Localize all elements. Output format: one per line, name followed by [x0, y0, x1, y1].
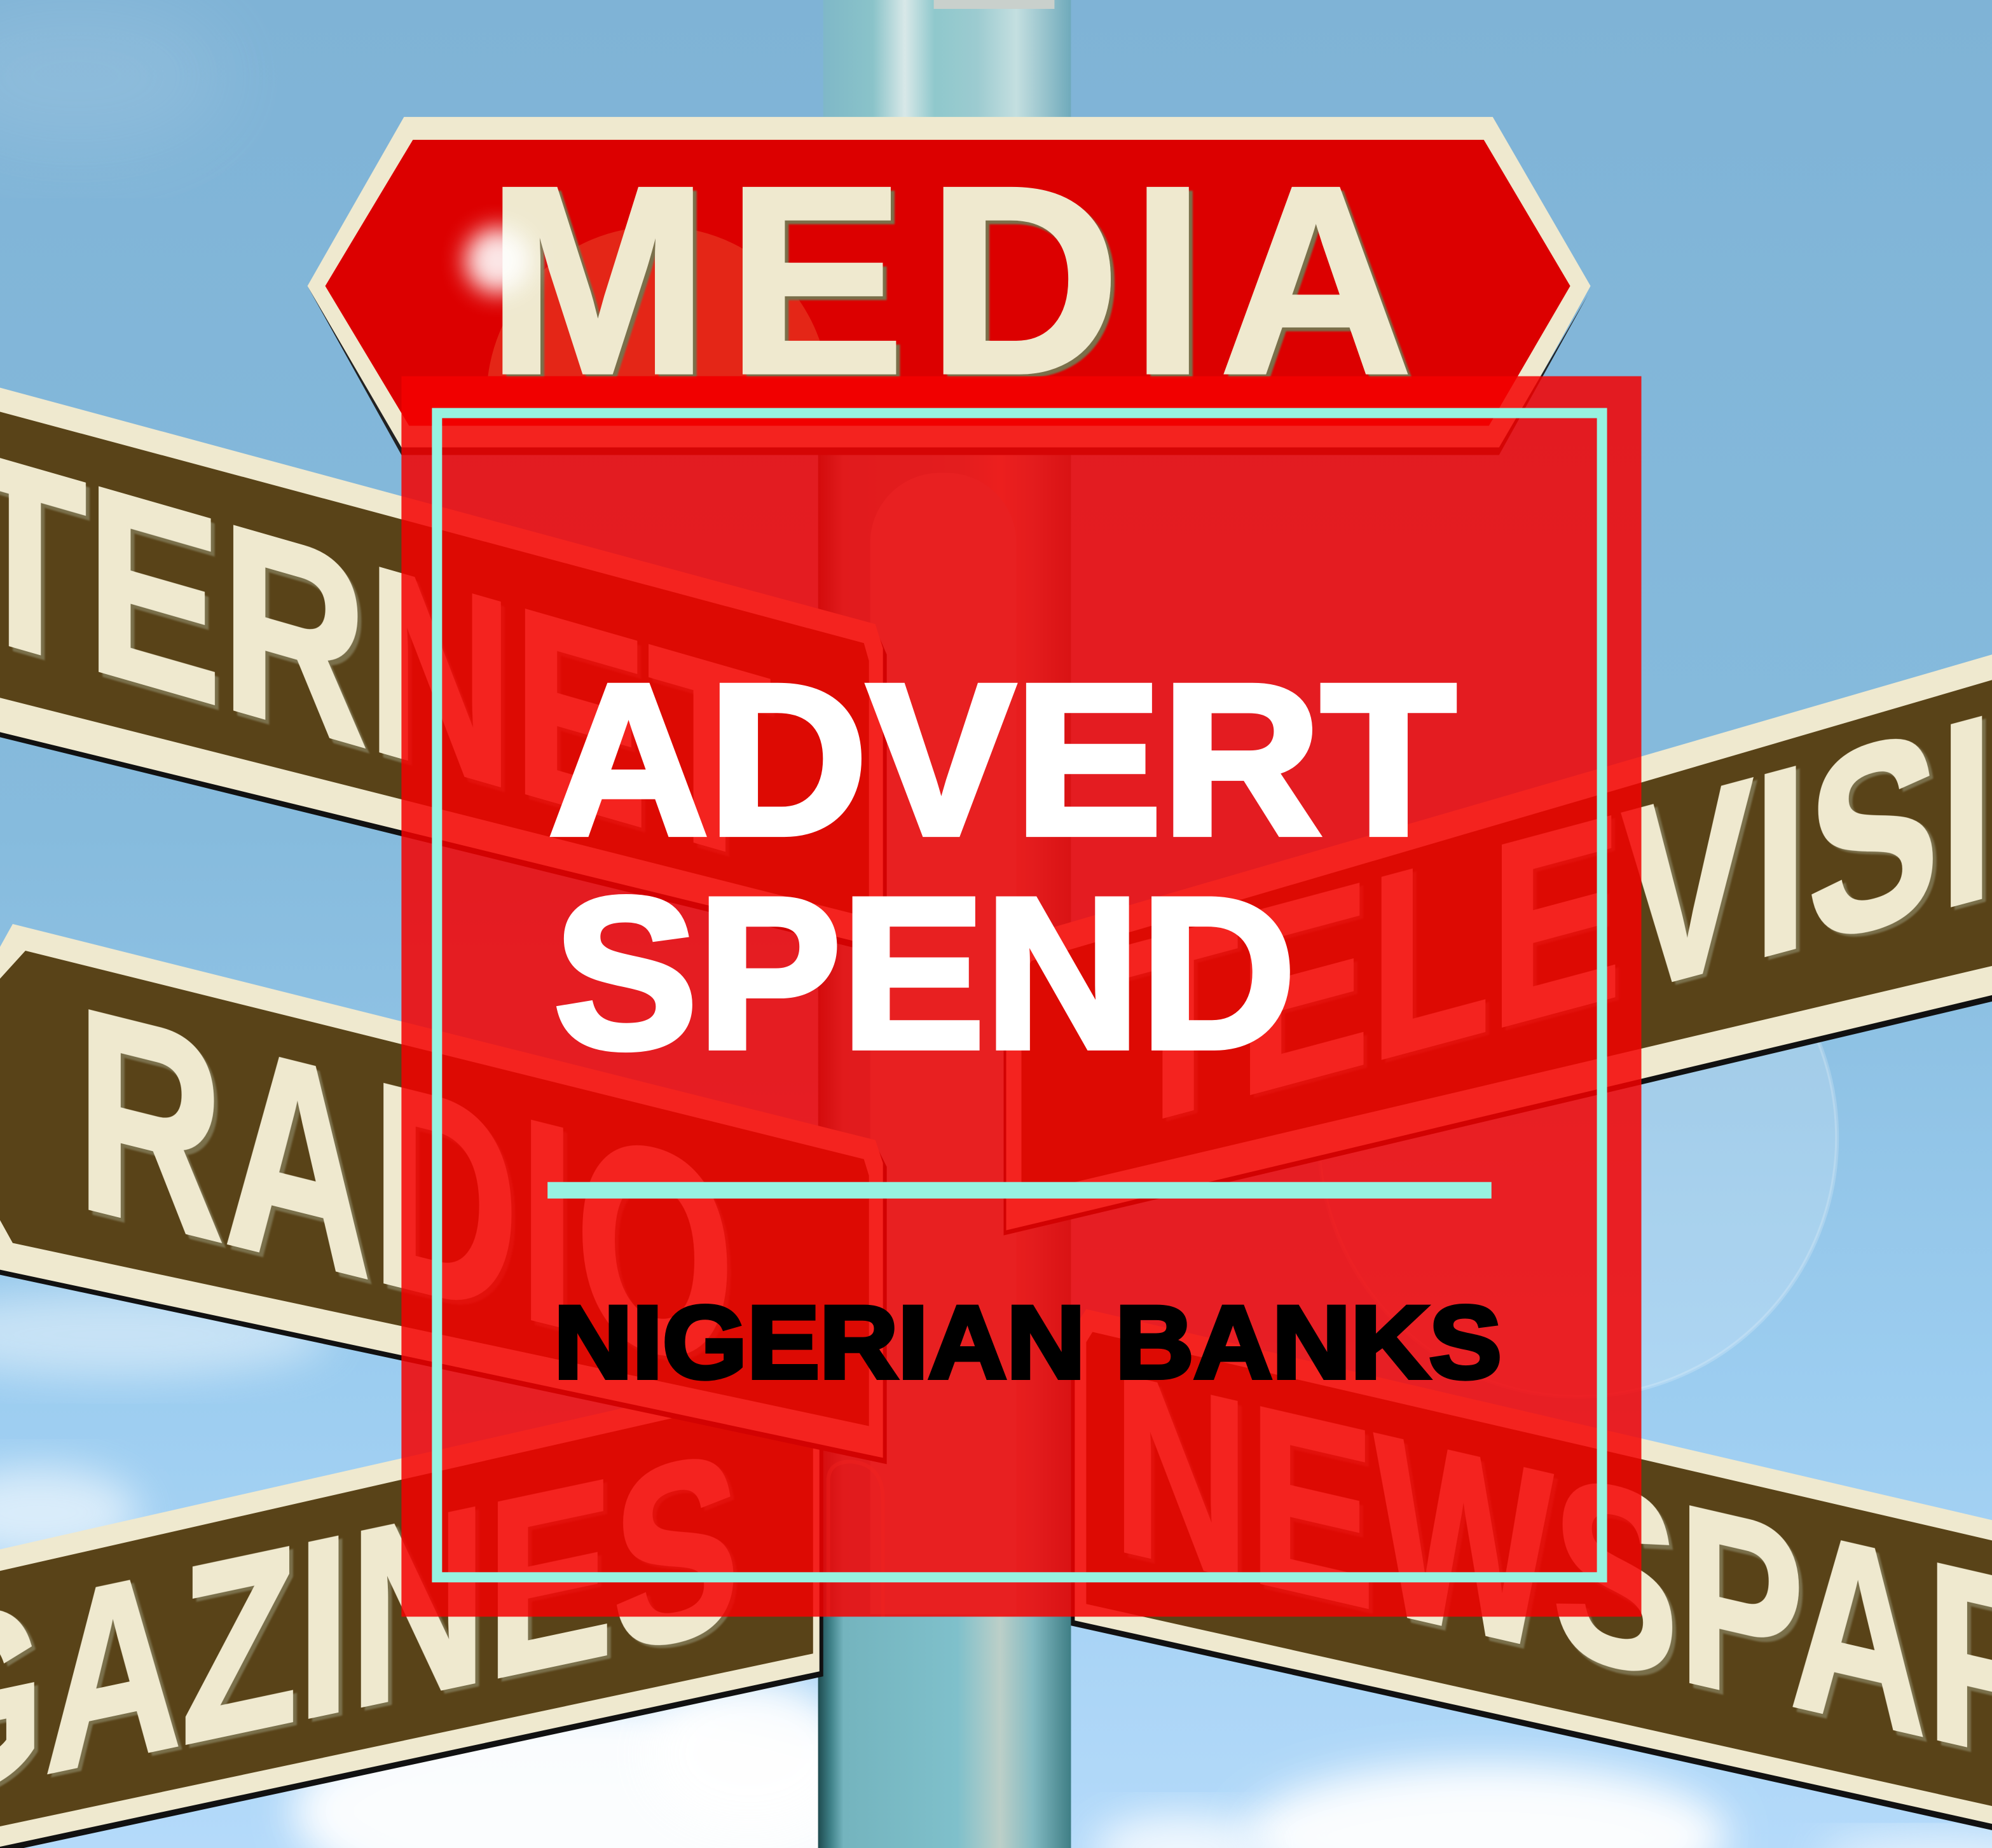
sign: media: I [1130, 131, 1205, 429]
sign: radio: RADIO [76, 946, 734, 1430]
sign: media: E [727, 131, 905, 429]
lens flare ring [1319, 878, 1837, 1396]
red translucent panel [401, 376, 1642, 1617]
title line: spend: SPEND [554, 853, 1296, 1093]
title [549, 639, 1456, 1093]
sign: media: D [928, 131, 1120, 429]
title line: advert: ADVERT [549, 639, 1456, 879]
pole bracket below radio sign [828, 1461, 883, 1617]
sign: magazines [0, 1365, 823, 1848]
sign: media [308, 117, 1591, 455]
subtitle: NIGERIAN BANKS [554, 1285, 1502, 1400]
sign: media: A [1219, 131, 1412, 429]
sign: media: M [486, 131, 709, 429]
divider line [547, 1182, 1492, 1199]
mint panel frame [437, 413, 1602, 1577]
signpost pole [818, 0, 1071, 1848]
